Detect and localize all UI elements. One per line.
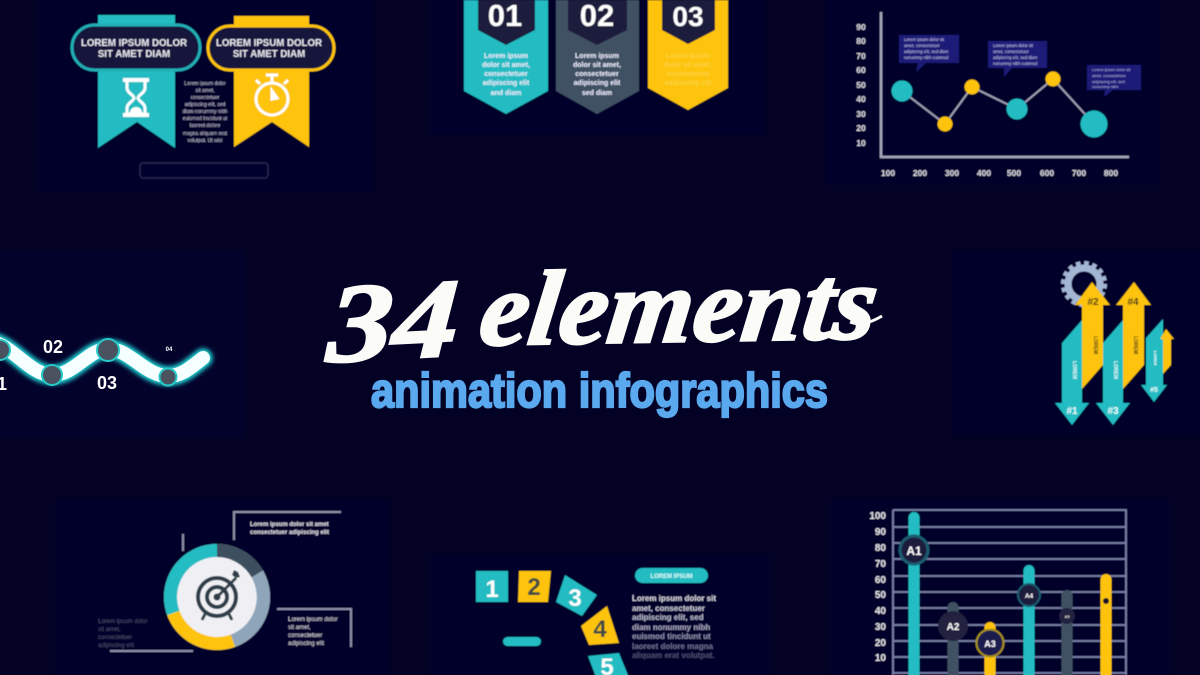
x axis labels: 700 [1072,168,1086,178]
x axis labels: 800 [1104,168,1118,178]
banner 03: 03 [672,1,704,32]
bar A2: A2 [947,622,960,633]
text block: ribbon description: Lorem ipsum dolor [184,81,226,87]
wave line [0,342,203,376]
text block: ribbon description: sit amet, [196,88,214,94]
title: 34 elements: 34 [324,257,462,387]
panel: numbered arc [430,555,770,675]
connector: right [277,609,351,647]
panel: target donut [55,500,390,675]
bar A4: A4 [1025,593,1034,600]
y axis labels: 30 [875,622,886,633]
wave labels: 04 [166,347,173,353]
text block: ribbon description: diam nonummy nibh [182,109,228,115]
y axis labels: 50 [875,590,886,601]
bar A2 [938,602,968,675]
grid [893,510,1126,675]
y axis labels: 10 [856,138,866,148]
x axis labels: 200 [913,168,927,178]
wave labels: 02 [43,337,63,357]
data line [902,79,1094,124]
y axis labels: 40 [856,94,866,104]
banner 02 [556,0,639,114]
text: right label [288,617,338,647]
arrow: #2: LOREM [1092,336,1098,354]
bar A6 [1100,574,1112,675]
connector: top [234,512,341,540]
banner 03: adipiscing elit [665,80,712,87]
y axis labels: 30 [856,109,866,119]
title: 34 elements [324,245,884,387]
pill heading: yellow: LOREM IPSUM DOLOR [216,38,322,49]
callout 3: nonummy nibh [1092,84,1118,89]
text: top label: Lorem ipsum dolor sit amet [250,522,329,528]
small pill [503,637,541,646]
step 3: 3 [568,585,582,612]
banner 02: sed diam [582,90,612,97]
arrow: #4 [1116,282,1151,389]
y axis labels: 90 [856,22,866,32]
y axis labels [869,511,886,664]
bar A5: A5 [1064,614,1070,619]
y axis labels: 20 [856,123,866,133]
step 5 [588,653,630,675]
x axis labels [881,168,1118,178]
title: 34 elements: elements [474,245,884,369]
callout 2 [988,41,1047,77]
icon: gear [1063,263,1105,305]
ribbon: teal [98,15,175,148]
panel: line chart [825,0,1160,185]
callout 3 [1087,65,1141,97]
step 4: 4 [593,616,607,643]
arrow: #3: LOREM [1112,361,1118,379]
callout 2: amet, consectetuer [993,49,1029,54]
ribbon: yellow [234,16,309,147]
callout 3: amet, consectetuer [1092,73,1127,78]
pill heading: teal: LOREM IPSUM DOLOR [81,38,187,49]
x axis labels: 400 [977,168,991,178]
donut chart [164,544,270,650]
y axis labels: 90 [875,527,886,538]
pill label [635,568,708,583]
text: right label: sit amet, [288,625,311,631]
callout 1: nonummy nibh euismod [904,55,949,60]
x axis labels: 600 [1040,168,1054,178]
x axis labels: 500 [1007,168,1021,178]
arrow: #1: LOREM [1071,361,1077,379]
text: left label: sit amet, [98,627,121,633]
banner 03: consectetuer [666,71,710,78]
text block: ribbon description: consectetuer [191,95,220,101]
step 1: 1 [485,576,499,603]
text block: aliquam erat volutpat. [632,651,715,660]
footer bar [140,163,268,178]
pill heading: yellow [208,26,334,70]
text: left label [98,619,148,649]
bar A3: A3 [984,639,996,649]
subtitle: animation infographics: animation infographics [371,365,828,418]
pill heading: teal: SIT AMET DIAM [98,49,170,60]
step 4 [581,606,619,645]
x axis labels: 300 [945,168,959,178]
arrow: #3: #3 [1107,406,1119,417]
bar A1 [900,512,928,675]
pill heading: teal [72,25,200,70]
y axis labels [856,22,866,148]
y axis labels: 20 [875,638,886,649]
icon: target [198,570,240,620]
text: top label: consectetuer adipiscing elit [250,530,329,536]
text block: ribbon description: volutpat. Ut wisi [187,138,223,144]
text block: laoreet dolore magna [632,642,713,651]
callout 3: Lorem ipsum dolor sit [1092,67,1131,72]
panel: arrows [952,250,1200,435]
step 2: 2 [527,574,541,601]
text: left label: consectetuer [98,635,132,641]
arrow: #5: #5 [1150,387,1158,394]
text block: adipiscing elit, sed [632,613,704,622]
panel: bar chart [830,500,1170,675]
arrow: #4: LOREM [1132,336,1138,354]
arrow: small yellow [1160,329,1174,374]
text block [632,594,716,660]
y axis labels: 80 [856,36,866,46]
step 3 [556,575,597,616]
panel: wave timeline [0,250,245,438]
wave labels [0,337,173,394]
banner 02: Lorem ipsum [575,53,619,60]
arrow: #5 [1141,319,1167,402]
text: right label: consectetuer [288,633,322,639]
banner 01 [464,0,548,114]
banner 01: consectetuer [484,71,528,78]
text: left label: adipiscing elit [98,643,134,649]
chart axes [881,12,1129,157]
panel: ribbons [38,0,372,192]
banner 02: dolor sit amet, [573,62,621,69]
x axis labels: 100 [881,168,895,178]
step 1 [476,571,508,603]
step 2 [518,571,551,602]
banner 01: and diam [491,90,521,97]
text: left label: Lorem ipsum dolor [98,619,148,625]
data points [892,72,1108,138]
banner 03: dolor sit amet, [664,62,712,69]
text block: ribbon description: euismod tincidunt ut [183,116,228,122]
banner 03 [648,0,728,110]
wave glow [0,342,203,376]
y axis labels: 70 [875,559,886,570]
icon: hourglass [123,80,149,115]
callout 1: Lorem ipsum dolor sit [904,37,945,42]
text block: amet, consectetuer [632,604,705,613]
text block: ribbon description: adipiscing elit, sed [185,102,226,108]
y axis labels: 80 [875,543,886,554]
text: right label: adipiscing elit [288,641,324,647]
y axis labels: 70 [856,51,866,61]
text: right label: Lorem ipsum dolor [288,617,338,623]
panel: numbered banners [430,0,765,135]
callout 1 [899,35,959,72]
y axis labels: 10 [875,653,886,664]
bar A1: A1 [906,544,922,558]
callout 1: amet, consectetuer [904,43,940,48]
connector: short vertical [182,534,184,551]
text block: ribbon description [182,81,228,144]
icon: stopwatch [256,75,288,115]
wave nodes [0,339,176,386]
banner 02: consectetuer [575,71,619,78]
arrow: #3 [1096,320,1130,425]
banner 01: Lorem ipsum [484,53,528,60]
y axis labels: 60 [875,575,886,586]
text block: euismod tincidunt ut [632,632,711,641]
connector: bottom [110,650,193,652]
text block: ribbon description: magna aliquam erat [183,131,228,137]
arrow: #1 [1055,320,1089,425]
y axis labels: 40 [875,606,886,617]
pill heading: yellow: SIT AMET DIAM [233,49,305,60]
arrow: #5: LOREM [1153,351,1158,366]
bar A3 [976,622,1004,675]
callout 2: Lorem ipsum dolor sit [993,43,1034,48]
y axis labels: 100 [869,511,886,522]
banner 02: adipiscing elit [574,80,621,87]
text block: diam nonummy nibh [632,623,710,632]
callout 2: nonummy nibh euismod [993,61,1038,66]
pill label: LOREM IPSUM [650,574,693,580]
callout 3: adipiscing elit, sed [1092,79,1125,84]
text: top label [250,522,329,536]
arrow: #1: #1 [1066,406,1078,417]
text block: Lorem ipsum dolor sit [632,594,716,603]
arrow: #2 [1075,282,1110,389]
y axis labels: 60 [856,65,866,75]
callout 2: adipiscing elit, sed diam [993,55,1038,60]
banner 01: adipiscing elit [483,80,530,87]
y axis labels: 50 [856,80,866,90]
wave labels: 03 [97,373,117,393]
callout 1: adipiscing elit, sed diam [904,49,949,54]
banner 01: dolor sit amet, [482,62,530,69]
bar A5 [1059,590,1075,675]
arrow: #4: #4 [1127,297,1139,308]
arrow: #2: #2 [1087,297,1099,308]
text block: ribbon description: laoreet dolore [190,123,221,129]
banner 03: Lorem ipsum [666,53,710,60]
bar A4 [1018,565,1040,675]
